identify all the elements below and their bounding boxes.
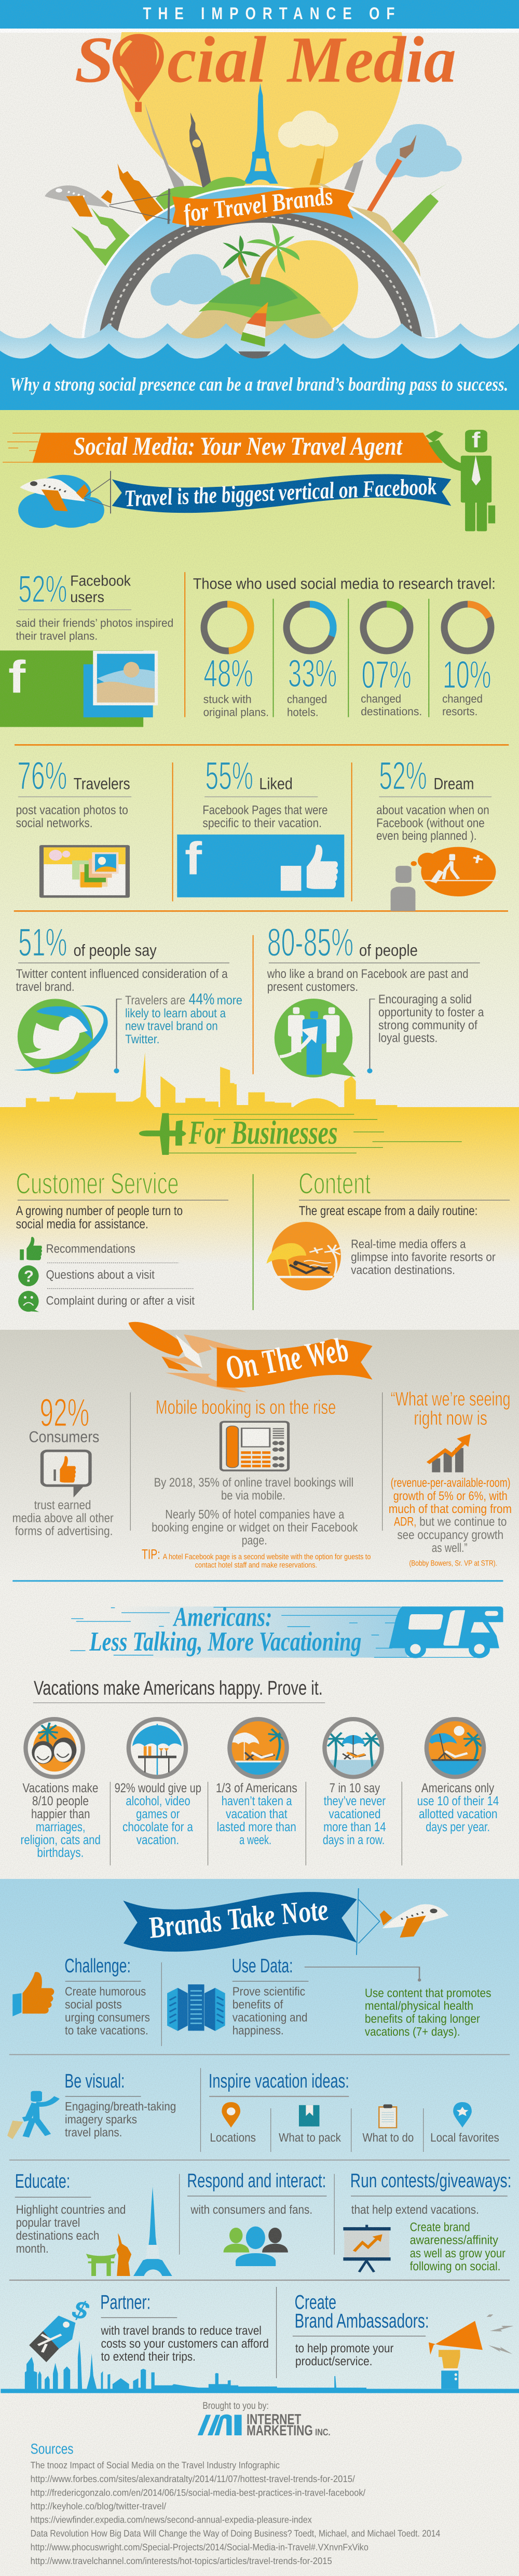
callout: twitter: more bbox=[217, 993, 242, 1007]
stat: 80-85% of people: present customers. bbox=[267, 979, 358, 993]
stat: 76% travelers: Travelers bbox=[74, 775, 130, 793]
stat: 52% facebook users: said their friends’ photos inspired bbox=[16, 617, 173, 629]
yellow city skyline bbox=[26, 1052, 397, 1108]
tip: A hotel Facebook page is a second website with the option for guests to bbox=[163, 1552, 371, 1561]
heading: social media bbox=[75, 23, 456, 96]
tip: challenge: to take vacations. bbox=[65, 2024, 148, 2037]
banner: brands take note with plane: Brands Take Note bbox=[144, 1892, 332, 1945]
heading: for businesses bbox=[139, 1113, 462, 1155]
column: content: Content bbox=[298, 1167, 371, 1200]
panel: brands take note lower section bbox=[1, 2187, 519, 2566]
panel: for businesses and on the web headers bbox=[16, 1052, 510, 1531]
callout: twitter: Twitter. bbox=[125, 1032, 159, 1046]
banner text: for Travel Brands bbox=[181, 182, 335, 227]
callout: longer vacations bbox=[305, 1967, 491, 2038]
title bar bbox=[0, 0, 519, 29]
stat: 51% of people say: Twitter content influenced consideration of a bbox=[16, 966, 228, 980]
column: seven in ten bbox=[322, 1717, 386, 1847]
heading: mobile booking: Mobile booking is on the rise bbox=[156, 1396, 336, 1419]
icon: green facebook man: f bbox=[472, 428, 481, 452]
icon: green thumb up bbox=[20, 1237, 42, 1260]
icon: plane and cloud bbox=[18, 471, 111, 528]
sources list: http://www.forbes.com/sites/alexandratalty/2014/11/07/hottest-travel-trends-for-2015/ bbox=[31, 2474, 355, 2484]
icon: price tag bbox=[29, 2296, 94, 2362]
column: happier: Vacations make bbox=[22, 1781, 98, 1795]
text: educate body: popular travel bbox=[16, 2216, 80, 2229]
text: mobile booking details: By 2018, 35% of online travel bookings will bbox=[154, 1476, 353, 1489]
tip: contact hotel staff and make reservations. bbox=[195, 1561, 317, 1569]
heading: less talking more vacationing with rv: Americans: bbox=[173, 1602, 272, 1632]
column: give up: chocolate for a bbox=[122, 1820, 193, 1834]
tip: inspire vacation ideas: Inspire vacation ideas: bbox=[209, 2070, 349, 2092]
stat: 76% travelers: 76% bbox=[17, 754, 67, 798]
icon: facebook photo: f bbox=[8, 651, 26, 702]
column: give up: vacation. bbox=[136, 1833, 179, 1847]
column: seven in ten: they’ve never bbox=[324, 1794, 386, 1808]
quote: revpar growth: as well.” bbox=[432, 1541, 468, 1555]
callout: twitter: new travel brand on bbox=[125, 1019, 218, 1033]
column: happier: 8/10 people bbox=[32, 1794, 89, 1808]
quote: revpar growth bbox=[389, 1476, 512, 1568]
panel: yellow section background bbox=[0, 1107, 519, 1264]
landmark: grey tower bbox=[344, 160, 363, 193]
icon: phone booking console bbox=[221, 1422, 289, 1470]
panel: grey section background bbox=[0, 1330, 519, 1577]
callout: loyal guests bbox=[367, 992, 484, 1073]
tip: be visual: imagery sparks bbox=[65, 2113, 137, 2126]
tip: use data: Use Data: bbox=[231, 1955, 293, 1977]
text: respond body: with consumers and fans. bbox=[190, 2203, 312, 2216]
donut labels: destinations. bbox=[361, 705, 422, 718]
text: trust earned: media above all other bbox=[12, 1511, 114, 1525]
stat: 52% dream bbox=[376, 754, 491, 842]
icon: price tag: $ bbox=[67, 2296, 94, 2325]
column: happier bbox=[21, 1717, 101, 1860]
icon: beach lounger bbox=[266, 1222, 341, 1290]
quote: what we are seeing bbox=[391, 1388, 510, 1429]
panel: blue section background bbox=[0, 1879, 519, 2389]
heading: for businesses: For Businesses bbox=[188, 1114, 338, 1151]
column: one third: a week. bbox=[239, 1833, 271, 1847]
tip: brand ambassadors: Create bbox=[295, 2291, 336, 2313]
stat: 52% dream: 52% bbox=[379, 754, 427, 798]
column: happier: marriages, bbox=[36, 1820, 86, 1834]
icon: loyal customers bubble bbox=[275, 999, 356, 1078]
sources list: https://viewfinder.expedia.com/news/second-annual-expedia-pleasure-index bbox=[31, 2515, 312, 2525]
banner: brands take note with plane bbox=[123, 1888, 448, 1955]
icon: happy faces bbox=[23, 1717, 85, 1779]
stat: 51% of people say: of people say bbox=[74, 942, 157, 959]
column: customer service: Questions about a visit bbox=[46, 1268, 155, 1282]
stat: 55% liked: specific to their vacation. bbox=[202, 816, 322, 830]
text: trust earned bbox=[12, 1498, 114, 1538]
icon: person dreaming of travel bbox=[391, 847, 498, 911]
tip: challenge: urging consumers bbox=[65, 2011, 150, 2024]
icon: rv camper bbox=[389, 1606, 503, 1658]
heading: less talking more vacationing with rv bbox=[70, 1602, 503, 1658]
text: educate body: month. bbox=[16, 2242, 49, 2255]
tip: be visual: travel plans. bbox=[65, 2126, 122, 2139]
tip: partner: costs so your customers can afford bbox=[101, 2337, 269, 2350]
column: give up: alcohol, video bbox=[126, 1794, 190, 1808]
column: one third: lasted more than bbox=[217, 1820, 296, 1834]
stat: 51% of people say bbox=[16, 920, 229, 993]
column: content: vacation destinations. bbox=[351, 1263, 455, 1277]
tip: challenge: social posts bbox=[65, 1998, 122, 2011]
tip: inspire vacation ideas: What to pack bbox=[279, 2131, 341, 2144]
tip: partner bbox=[100, 2291, 269, 2363]
callout: twitter: likely to learn about a bbox=[125, 1006, 226, 1020]
white strip under title bar bbox=[0, 29, 519, 33]
tip: inspire vacation ideas bbox=[209, 2070, 499, 2152]
heading: social media: Media bbox=[286, 23, 456, 96]
icon: twitter globe bbox=[14, 999, 108, 1074]
stat: 92% consumers bbox=[29, 1391, 99, 1446]
tip: partner: to extend their trips. bbox=[101, 2350, 196, 2363]
tip: use data: Prove scientific bbox=[233, 1985, 305, 1998]
donut labels: 33% bbox=[288, 651, 337, 695]
hero scene drawn in zoom coordinates bbox=[0, 4, 519, 410]
tip: brand ambassadors bbox=[293, 2291, 429, 2368]
icon: growth chart bbox=[428, 1434, 471, 1473]
stat: 55% liked bbox=[202, 754, 327, 830]
heading: on the web rocket banner: On The Web bbox=[220, 1330, 353, 1387]
speed lines bbox=[3, 433, 42, 462]
column: seven in ten: vacationed bbox=[329, 1807, 380, 1821]
stat: 52% facebook users: users bbox=[70, 589, 104, 605]
tip: be visual bbox=[7, 2070, 176, 2139]
landmark: big ben bbox=[189, 113, 212, 193]
stat: 80-85% of people: 80-85% bbox=[267, 920, 353, 964]
stat: 52% facebook users: their travel plans. bbox=[16, 630, 98, 643]
donut labels: resorts. bbox=[442, 705, 477, 718]
stat: 51% of people say: 51% bbox=[18, 920, 67, 964]
column: seven in ten: more than 14 bbox=[323, 1820, 386, 1834]
icon: data servers bbox=[167, 1984, 225, 2031]
icon: tablet with photos bbox=[39, 845, 130, 898]
small sun and cloud bbox=[151, 240, 358, 333]
panel: social media your new travel agent bbox=[0, 428, 496, 727]
icon: favorite pin bbox=[453, 2102, 472, 2128]
tip: partner: Partner: bbox=[100, 2291, 151, 2313]
green hills and chicago tower bbox=[71, 163, 447, 278]
tip: inspire vacation ideas: What to do bbox=[362, 2131, 414, 2144]
text: trust earned: trust earned bbox=[34, 1498, 91, 1512]
icon: green facebook man bbox=[426, 428, 495, 531]
text: mobile booking details: be via mobile. bbox=[221, 1488, 285, 1502]
tip: use data: benefits of bbox=[233, 1998, 283, 2011]
stat: 80-85% of people bbox=[267, 920, 480, 993]
stat: 76% travelers: social networks. bbox=[16, 816, 93, 830]
banner: for travel brands bbox=[45, 182, 354, 227]
callout: loyal guests: loyal guests. bbox=[378, 1031, 438, 1045]
tip: challenge: Challenge: bbox=[64, 1955, 131, 1977]
icon: palms and pool bbox=[322, 1717, 384, 1779]
blue cloud and needle tower bbox=[362, 124, 462, 219]
stat: 92% consumers: 92% bbox=[40, 1391, 89, 1435]
tip: challenge: Create humorous bbox=[65, 1985, 146, 1998]
credit: brought to you by: INC. bbox=[315, 2427, 331, 2437]
column: seven in ten: 7 in 10 say bbox=[330, 1781, 380, 1795]
icon: megaphone bbox=[429, 2306, 514, 2389]
icon: blue traveler bbox=[7, 2091, 57, 2139]
text: educate body bbox=[16, 2203, 126, 2255]
landmark: cream cloud bbox=[278, 111, 338, 148]
credit: brought to you by: MARKETING bbox=[247, 2422, 313, 2438]
panel: hero header bbox=[0, 0, 519, 410]
panel: brands take note bbox=[7, 1888, 511, 2255]
heading: respond and interact: Respond and interact: bbox=[187, 2170, 326, 2191]
panel: green section background bbox=[0, 408, 519, 1106]
callout: brand awareness bbox=[410, 2220, 506, 2273]
text: educate body: destinations each bbox=[16, 2229, 99, 2242]
stat: 76% travelers bbox=[16, 754, 131, 830]
column: one third: haven’t taken a bbox=[222, 1794, 292, 1808]
icon: presentation board bbox=[343, 2225, 391, 2272]
tip: inspire vacation ideas: Locations bbox=[210, 2131, 256, 2144]
donut labels: changed bbox=[361, 692, 401, 705]
icon: question bubble: ? bbox=[24, 1267, 34, 1285]
blue skyline ground bbox=[1, 2340, 519, 2393]
column: happier: happier than bbox=[31, 1807, 90, 1821]
heading: social media: o bbox=[116, 23, 159, 96]
column: give up: 92% would give up bbox=[115, 1781, 201, 1795]
donut labels: changed bbox=[442, 692, 483, 705]
landmark: gold tower bbox=[309, 143, 325, 185]
heading: on the web rocket banner bbox=[128, 1322, 373, 1393]
text: mobile booking details bbox=[152, 1476, 358, 1547]
icon: sailboat bbox=[238, 302, 271, 359]
icon: world landmarks bbox=[86, 2187, 172, 2276]
tip: be visual: Engaging/breath-taking bbox=[65, 2100, 176, 2113]
text: mobile booking details: page. bbox=[242, 1533, 267, 1547]
big yellow sun bbox=[120, 32, 404, 188]
icon: orange thumb bbox=[12, 1972, 54, 2016]
stat: 55% liked: 55% bbox=[205, 754, 253, 798]
tip: brand ambassadors: product/service. bbox=[295, 2354, 373, 2368]
text: trust earned: forms of advertising. bbox=[15, 1524, 113, 1538]
icon: location pin bbox=[222, 2102, 240, 2128]
column: customer service: Recommendations bbox=[46, 1242, 135, 1256]
column: content bbox=[266, 1167, 510, 1290]
column: customer service: Complaint during or after a visit bbox=[46, 1294, 195, 1307]
column: customer service: A growing number of people turn to bbox=[16, 1203, 183, 1218]
sources list: Sources bbox=[31, 2441, 74, 2457]
panel: on the web details and americans bbox=[12, 1451, 512, 1865]
heading: social media: cial bbox=[167, 23, 267, 96]
icon: facebook like: f bbox=[185, 833, 202, 884]
stat: 52% facebook users bbox=[16, 568, 173, 643]
icon: facebook like bbox=[177, 833, 344, 897]
tip: partner: with travel brands to reduce travel bbox=[101, 2324, 262, 2337]
donut labels: changed bbox=[287, 693, 327, 705]
credit: brought to you by bbox=[198, 2400, 331, 2438]
column: one third bbox=[216, 1717, 297, 1847]
text: mobile booking details: booking engine or widget on their Facebook bbox=[152, 1520, 358, 1534]
text: mobile booking details: Nearly 50% of hotel companies have a bbox=[165, 1507, 344, 1521]
column: one third: vacation that bbox=[226, 1807, 288, 1821]
column: seven in ten: days in a row. bbox=[323, 1833, 385, 1847]
stat: 55% liked: Liked bbox=[259, 775, 293, 793]
tip: use data: vacationing and bbox=[233, 2011, 308, 2024]
chart: donut rings bbox=[204, 604, 491, 651]
column: one third: 1/3 of Americans bbox=[216, 1781, 297, 1795]
donut labels: 07% bbox=[361, 653, 412, 696]
sources list bbox=[31, 2441, 440, 2566]
tip bbox=[142, 1546, 371, 1569]
stat: 55% liked: Facebook Pages that were bbox=[202, 803, 327, 817]
icon: clipboard bbox=[378, 2104, 397, 2128]
donut labels: 48% bbox=[203, 651, 253, 695]
stat: 52% dream: Dream bbox=[434, 775, 474, 793]
icon: hot air balloon bbox=[113, 34, 164, 112]
column: customer service: social media for assistance. bbox=[16, 1217, 148, 1231]
stat: 51% of people say: travel brand. bbox=[16, 979, 75, 993]
island with palms bbox=[181, 224, 337, 352]
donut labels bbox=[203, 651, 491, 719]
landmark: spire tower bbox=[145, 103, 188, 199]
callout: brand awareness: Create brand bbox=[410, 2220, 470, 2234]
landmark: eiffel tower bbox=[243, 83, 278, 184]
text: educate body: Highlight countries and bbox=[16, 2203, 126, 2216]
icon: umbrella table bbox=[127, 1717, 188, 1779]
stat: 52% facebook users: Facebook bbox=[70, 573, 131, 589]
donut labels: hotels. bbox=[287, 706, 319, 719]
callout: twitter: 44% bbox=[189, 990, 214, 1007]
stat: 92% consumers: Consumers bbox=[29, 1428, 99, 1446]
sources list: The tnooz Impact of Social Media on the Travel Industry Infographic bbox=[31, 2460, 280, 2471]
callout: twitter: Travelers are bbox=[125, 993, 185, 1007]
icon: lounger under sun bbox=[425, 1717, 486, 1779]
column: only use ten bbox=[417, 1717, 499, 1834]
icon: complaint bubble bbox=[18, 1291, 39, 1312]
tip: use data: happiness. bbox=[233, 2024, 284, 2037]
tip: be visual: Be visual: bbox=[64, 2070, 125, 2092]
sources list: http://www.travelchannel.com/interests/hot-topics/articles/travel-trends-for-2015 bbox=[31, 2556, 332, 2566]
stat: 80-85% of people: of people bbox=[359, 942, 418, 959]
icon: towing plane bbox=[357, 1888, 448, 1955]
callout: twitter bbox=[114, 990, 242, 1073]
column: happier: birthdays. bbox=[37, 1846, 84, 1860]
icon: thumb speech bubble bbox=[42, 1451, 90, 1497]
column: give up bbox=[115, 1717, 201, 1847]
credit: brought to you by: INTERNET bbox=[247, 2411, 301, 2428]
tip: brand ambassadors: to help promote your bbox=[295, 2341, 393, 2355]
column: customer service bbox=[16, 1167, 228, 1312]
tip: challenge bbox=[12, 1955, 150, 2037]
tip: use data bbox=[167, 1955, 308, 2037]
donut labels: stuck with bbox=[203, 693, 252, 705]
heading: educate: Educate: bbox=[15, 2170, 70, 2192]
column: customer service: Customer Service bbox=[16, 1167, 179, 1200]
arch road and rainbow bbox=[83, 186, 437, 338]
icon: group of people bbox=[224, 2227, 288, 2266]
plane towing banner bbox=[45, 185, 170, 224]
heading: social media: S bbox=[75, 23, 114, 96]
icon: question bubble bbox=[18, 1265, 39, 1286]
donut labels: original plans. bbox=[203, 706, 269, 719]
icon: facebook photo bbox=[0, 650, 158, 727]
credit: brought to you by: Brought to you by: bbox=[202, 2400, 269, 2411]
quote: revpar growth: ADR, bbox=[394, 1515, 416, 1529]
icon: book bbox=[299, 2105, 319, 2127]
callout: longer vacations: vacations (7+ days). bbox=[365, 2025, 460, 2038]
tip: TIP: bbox=[142, 1546, 160, 1562]
banner: biggest vertical on facebook bbox=[112, 473, 451, 513]
heading: the importance of: THE IMPORTANCE OF bbox=[143, 4, 394, 23]
panel: facebook and twitter stats bbox=[14, 744, 509, 1078]
stat: 52% facebook users: 52% bbox=[18, 568, 67, 610]
sources list: http://keyhole.co/blog/twitter-travel/ bbox=[31, 2501, 167, 2512]
sea waves back layer bbox=[0, 323, 519, 365]
column: happier: religion, cats and bbox=[21, 1833, 101, 1847]
sea waves front layer bbox=[0, 344, 519, 410]
icon: beach chair orange bbox=[227, 1717, 289, 1779]
column: give up: games or bbox=[136, 1807, 180, 1821]
stat: 76% travelers: post vacation photos to bbox=[16, 803, 128, 817]
